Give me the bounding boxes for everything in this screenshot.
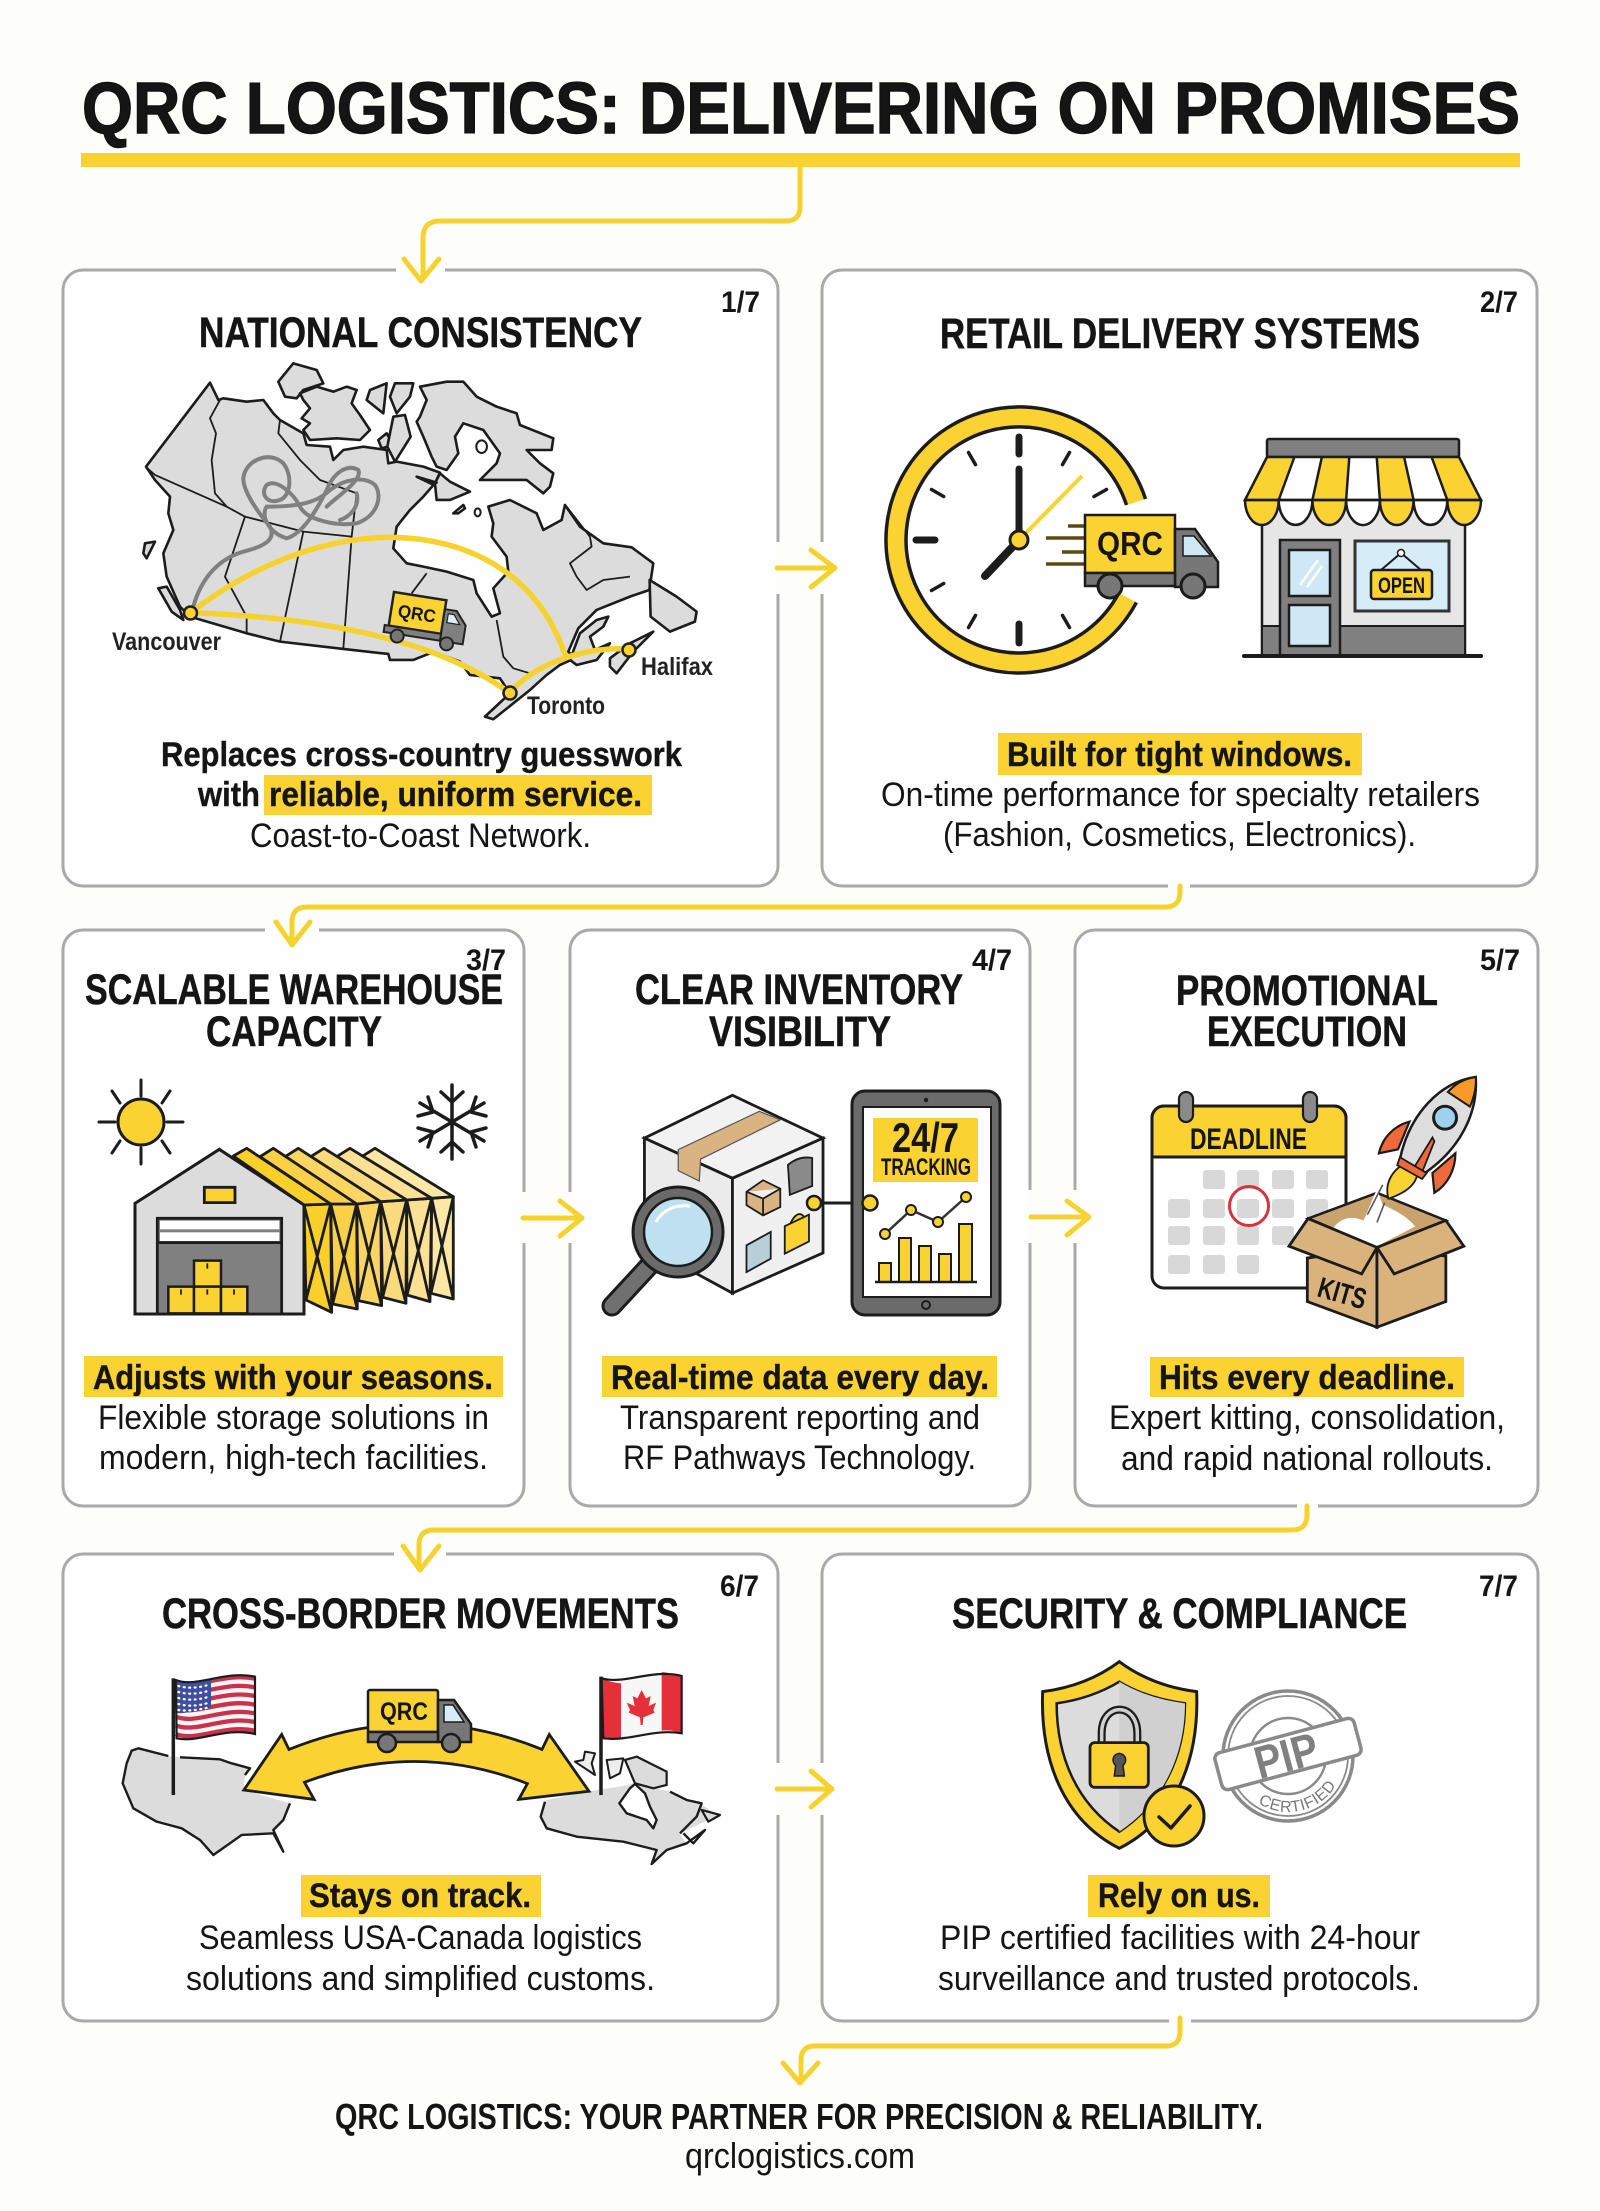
icon: rocket and kits box [1289,1077,1476,1327]
connector between box and tablet [807,1196,870,1210]
panel: cross-border movements [63,1554,778,2021]
icon: tablet with 24/7 tracking: TRACKING [881,1154,971,1181]
panel: retail delivery systems [822,270,1537,886]
icon: PIP certified stamp: CERTIFIED [1260,1782,1334,1812]
body text [881,733,1480,854]
heading: security and compliance: SECURITY & COMPLIANCE [952,1590,1407,1638]
arrow: panel 1 to panel 2 [777,542,835,594]
body text [84,1356,503,1477]
icon: snowflake [418,1085,486,1159]
arrow: panel 2 to panel 3 [265,886,1190,945]
arrow: panel 5 to panel 6 [394,1506,1318,1570]
body text: RF Pathways Technology. [623,1439,976,1477]
body text: Hits every deadline. [1159,1359,1455,1397]
heading: scalable warehouse capacity [85,966,503,1056]
heading: retail delivery systems: RETAIL DELIVERY SYSTEMS [940,310,1420,358]
step number 3/7: 3/7 [466,944,506,977]
heading: promotional execution: EXECUTION [1207,1008,1407,1056]
icon: truck on arrow: QRC [380,1698,428,1726]
icon: truck on arrow [368,1690,471,1752]
icon: tablet with 24/7 tracking: 24/7 [892,1114,959,1161]
icon: deadline calendar: DEADLINE [1190,1123,1307,1156]
body text: and rapid national rollouts. [1121,1440,1493,1478]
icon: canada map with flag [541,1672,720,1864]
body text: PIP certified facilities with 24-hour [940,1919,1420,1957]
icon: magnifying glass [612,1187,723,1306]
step number 6/7: 6/7 [720,1570,759,1603]
icon: PIP certified stamp [1213,1689,1363,1823]
body text: Seamless USA-Canada logistics [199,1919,642,1957]
body text: Replaces cross-country guesswork [161,736,682,774]
step number 5/7: 5/7 [1480,944,1520,977]
icon: shield with lock [1042,1662,1197,1848]
arrow: panel 3 to panel 4 [523,1192,582,1243]
footer [335,2096,1263,2176]
heading: national consistency: NATIONAL CONSISTENCY [199,309,642,357]
icon: clock [886,407,1146,673]
city label: Halifax: Halifax [641,653,713,681]
label: KITS: KITS [1314,1272,1370,1316]
body text: On-time performance for specialty retailers [881,776,1480,814]
arrow: panel 7 to footer [783,2018,1191,2083]
body text: Expert kitting, consolidation, [1109,1399,1505,1437]
arrow: title to panel 1 [396,167,800,281]
panel: scalable warehouse capacity [63,930,524,1506]
heading: cross-border movements: CROSS-BORDER MOVEMENTS [162,1590,679,1638]
icon: truck on map: QRC [397,601,437,627]
step number 4/7: 4/7 [972,944,1012,977]
icon: sun [99,1080,183,1164]
icon: PIP certified stamp: PIP [1249,1722,1324,1789]
icon: deadline calendar [1152,1092,1346,1288]
panel: clear inventory visibility [570,930,1030,1506]
heading: scalable warehouse capacity: CAPACITY [206,1008,382,1056]
heading: promotional execution: PROMOTIONAL [1176,967,1438,1015]
heading: clear inventory visibility: CLEAR INVENTORY [635,966,963,1014]
heading: scalable warehouse capacity: SCALABLE WAREHOUSE [85,966,503,1014]
body text [186,1875,655,1998]
step number 2/7: 2/7 [1480,286,1518,319]
panel: promotional execution [1075,930,1538,1506]
icon: truck on map [382,591,469,653]
body text: with [197,776,260,814]
heading: clear inventory visibility: VISIBILITY [709,1008,891,1056]
body text: modern, high-tech facilities. [99,1439,488,1477]
city label: Vancouver: Vancouver [112,628,221,656]
icon: check badge [1144,1786,1204,1846]
step number 7/7: 7/7 [1479,1570,1518,1603]
icon: double-headed arrow [244,1724,589,1799]
body text: Adjusts with your seasons. [93,1359,493,1397]
heading: clear inventory visibility [635,966,963,1056]
body text: Flexible storage solutions in [98,1399,489,1437]
icon: usa map with flag [123,1675,290,1855]
icon: speeding truck: QRC [1097,525,1163,562]
arrow: panel 6 to panel 7 [777,1763,832,1815]
panel: national consistency [63,270,778,886]
icon: storefront: OPEN [1378,573,1425,598]
panel: security and compliance [820,1552,1540,2022]
icon: canada route map [112,363,713,720]
body text [1109,1357,1505,1478]
icon: storefront [1244,439,1481,656]
icon: expanding warehouse [135,1148,453,1314]
footer tagline: QRC LOGISTICS: YOUR PARTNER FOR PRECISION & RELIABILITY. [335,2096,1263,2137]
city label: Toronto: Toronto [527,692,605,720]
arrow: panel 4 to panel 5 [1030,1190,1089,1243]
body text [161,736,682,855]
body text: surveillance and trusted protocols. [938,1960,1420,1998]
icon: tablet with 24/7 tracking [852,1091,1000,1315]
step number 1/7: 1/7 [721,286,760,319]
body text: (Fashion, Cosmetics, Electronics). [943,816,1416,854]
body text [602,1356,997,1477]
body text: Transparent reporting and [620,1399,980,1437]
body text: reliable, uniform service. [269,776,642,814]
body text: Real-time data every day. [611,1359,989,1397]
title underline [81,153,1520,167]
body text: Stays on track. [309,1877,531,1915]
body text: Coast-to-Coast Network. [250,817,591,855]
body text: Rely on us. [1098,1877,1260,1915]
icon: inventory box [644,1095,823,1293]
body text [938,1875,1420,1998]
body text: Built for tight windows. [1007,736,1352,774]
icon: speeding truck [1046,515,1218,598]
body text: solutions and simplified customs. [186,1960,655,1998]
footer website: qrclogistics.com [685,2135,915,2176]
heading: promotional execution [1176,967,1438,1056]
